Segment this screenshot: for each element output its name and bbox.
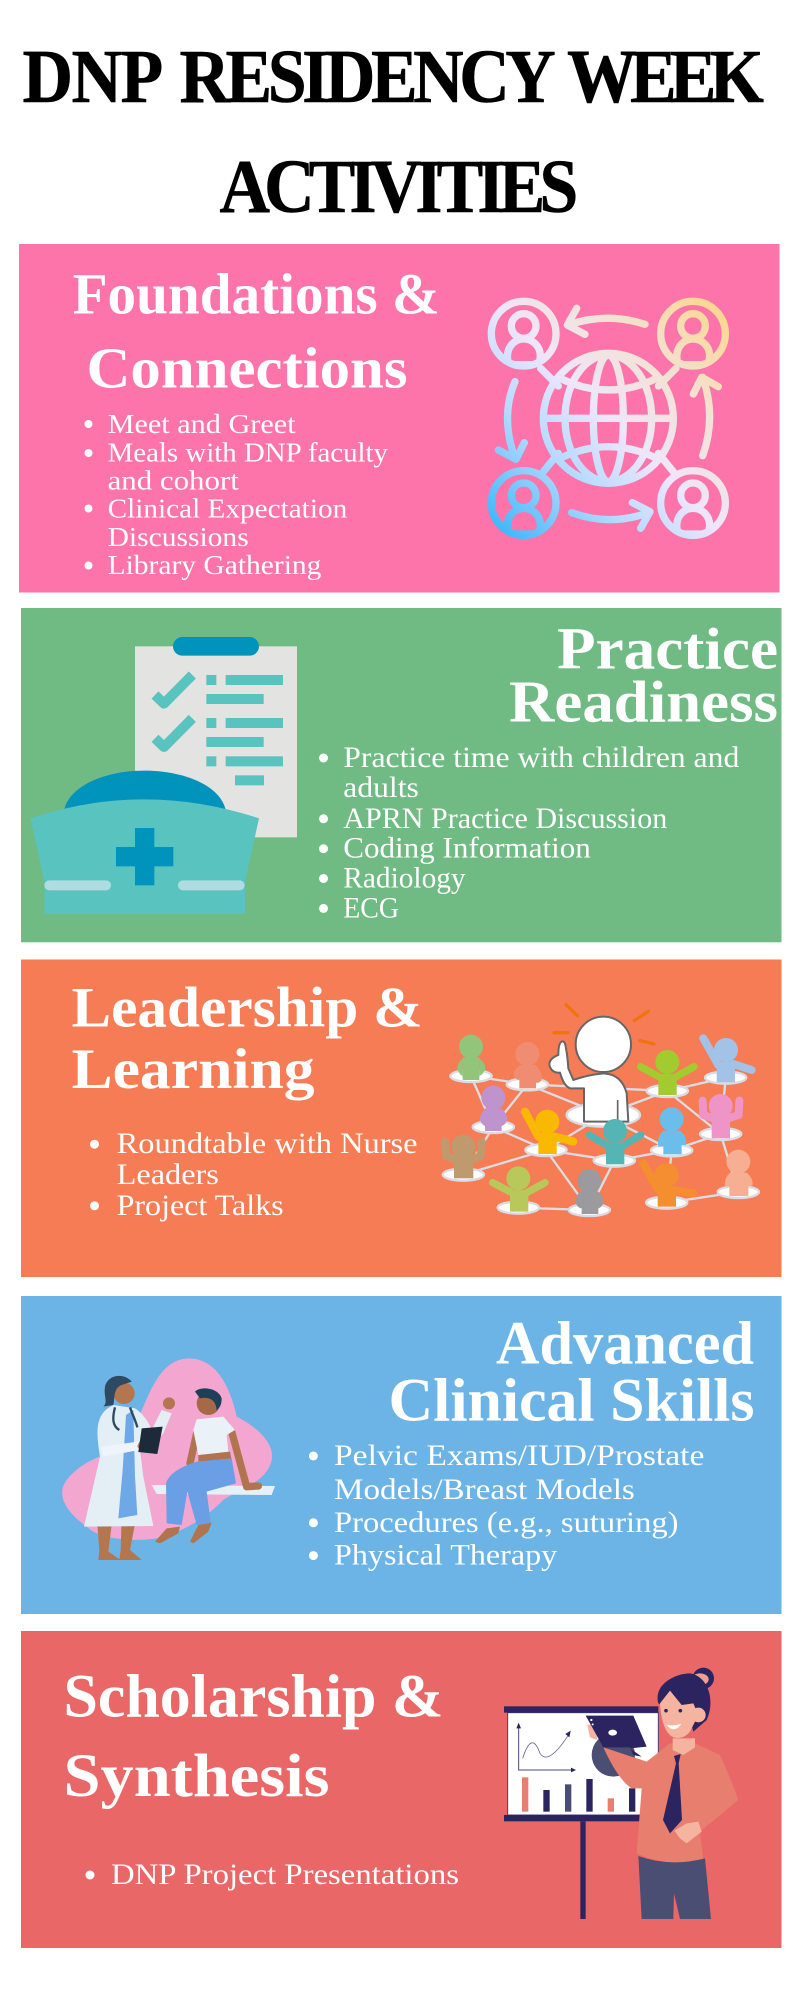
panel: Advanced Clinical Skills: [21, 1296, 782, 1614]
heading: Practice Readiness: Practice: [557, 616, 778, 682]
heading: Foundations & Connections: Foundations &: [73, 262, 440, 326]
heading: Scholarship & Synthesis: Scholarship &: [64, 1663, 444, 1730]
heading: Practice Readiness: Readiness: [509, 668, 778, 734]
bullet list: Foundations: Discussions: [108, 522, 249, 552]
heading: Advanced Clinical Skills: [388, 1311, 754, 1434]
bullet list: Leadership: Project Talks: [117, 1189, 284, 1222]
title: ACTIVITIES: [220, 144, 578, 229]
bullet list: Foundations: and cohort: [108, 466, 239, 496]
panel: Practice Readiness: [21, 608, 782, 942]
bullet list: Advanced Clinical Skills: [309, 1439, 704, 1572]
bullet list: Foundations: Meals with DNP faculty: [108, 438, 389, 468]
bullet list: Scholarship: DNP Project Presentations: [111, 1858, 459, 1891]
bullet list: Advanced Clinical Skills: Physical Therapy: [334, 1539, 557, 1572]
heading: Advanced Clinical Skills: Advanced: [496, 1311, 754, 1378]
icon: leader figure with network of people: [443, 1005, 759, 1216]
heading: Foundations & Connections: Connections: [86, 336, 408, 400]
bullet list: Practice Readiness: [319, 741, 739, 924]
bullet list: Foundations: [84, 409, 389, 580]
title: [22, 34, 764, 229]
panel: Foundations & Connections: [19, 244, 780, 592]
bullet list: Leadership: Roundtable with Nurse: [117, 1127, 418, 1160]
bullet list: Practice Readiness: adults: [343, 771, 419, 804]
bullet list: Advanced Clinical Skills: Models/Breast Models: [334, 1473, 635, 1506]
bullet list: Foundations: Meet and Greet: [108, 409, 296, 439]
title: DNP: [22, 34, 163, 119]
icon: doctor with patient: [62, 1358, 275, 1560]
bullet list: Practice Readiness: Radiology: [343, 862, 466, 894]
bullet list: Foundations: Clinical Expectation: [108, 493, 348, 523]
bullet list: Advanced Clinical Skills: Procedures (e.g., suturing): [334, 1506, 678, 1539]
heading: Foundations & Connections: [73, 262, 440, 400]
heading: Leadership & Learning: Learning: [72, 1038, 314, 1101]
bullet list: Foundations: Library Gathering: [108, 550, 321, 580]
bullet list: Practice Readiness: Practice time with children and: [343, 741, 739, 774]
icon: globe with connected people: [491, 301, 725, 535]
bullet list: Leadership: Leaders: [117, 1158, 219, 1191]
panel: Leadership & Learning: [21, 960, 782, 1277]
bullet list: Advanced Clinical Skills: Pelvic Exams/IUD/Prostate: [334, 1439, 704, 1472]
heading: Scholarship & Synthesis: Synthesis: [64, 1743, 330, 1810]
heading: Scholarship & Synthesis: [64, 1663, 444, 1810]
bullet list: Leadership: [90, 1127, 418, 1222]
heading: Leadership & Learning: Leadership &: [72, 976, 423, 1039]
heading: Practice Readiness: [509, 616, 778, 734]
icon: presenter with chart board: [504, 1668, 738, 1919]
icon: clipboard checklist and nurse cap: [31, 637, 297, 914]
heading: Leadership & Learning: [72, 976, 423, 1101]
title: RESIDENCY: [180, 34, 556, 119]
bullet list: Practice Readiness: APRN Practice Discussion: [343, 802, 667, 835]
bullet list: Practice Readiness: Coding Information: [343, 832, 591, 865]
heading: Advanced Clinical Skills: Clinical Skills: [388, 1367, 754, 1434]
title: WEEK: [567, 34, 764, 119]
panel: Scholarship & Synthesis: [21, 1631, 782, 1948]
bullet list: Practice Readiness: ECG: [343, 891, 399, 924]
